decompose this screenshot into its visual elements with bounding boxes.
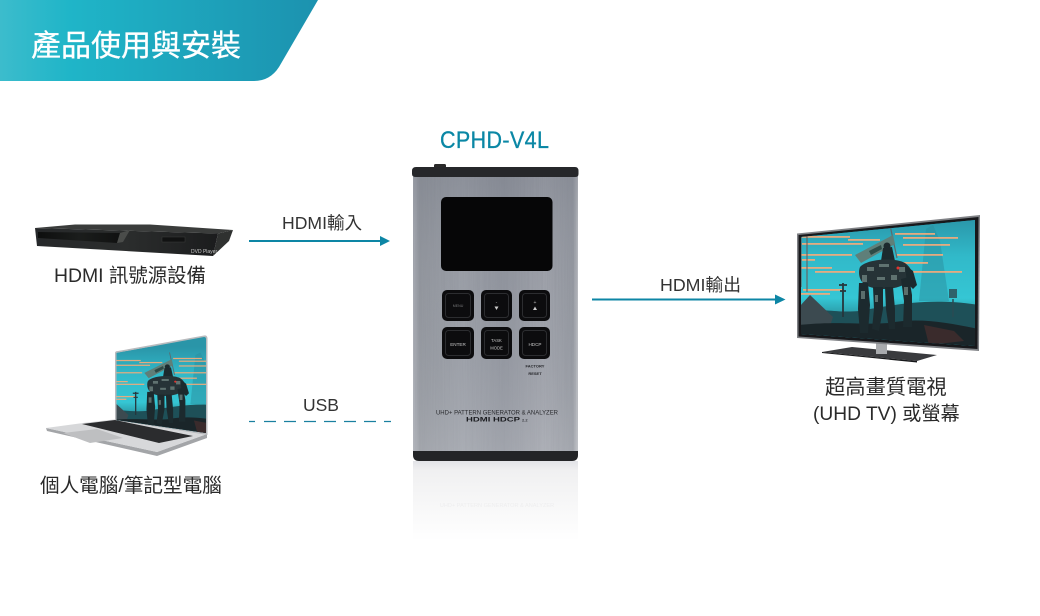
button: plus up [519, 290, 550, 321]
player brand: DVD Player [191, 249, 217, 255]
device: CPHD-V4L analyzer [412, 164, 578, 541]
device label: HDMI HDCP [466, 416, 521, 424]
label: UHD TV [813, 376, 960, 425]
bottom cap [413, 451, 578, 461]
TV stand [822, 342, 937, 362]
arrow: HDMI output [592, 275, 786, 304]
icon: laptop [46, 335, 208, 456]
device label: 2.2 [522, 418, 528, 422]
top cap [412, 164, 578, 177]
player buttons [162, 237, 185, 242]
disc slot [38, 232, 120, 243]
button: minus down [481, 290, 512, 321]
metal body [413, 175, 578, 453]
header banner [0, 0, 318, 81]
dashed link: USB: USB [303, 395, 339, 415]
factory reset label: FACTORY [526, 364, 545, 368]
trackpad [63, 429, 123, 443]
title: 產品使用與安裝 [31, 30, 241, 63]
label: HDMI source: HDMI 訊號源設備 [54, 265, 206, 287]
button: task mode: MODE [490, 346, 503, 350]
button: hdcp: HDCP [528, 342, 542, 347]
label: UHD TV: (UHD TV) 或螢幕 [813, 403, 960, 425]
button: menu: MENU [453, 304, 464, 308]
laptop base [46, 419, 207, 456]
device label: UHD+ PATTERN GENERATOR & ANALYZER [436, 410, 558, 416]
arrow: HDMI output: HDMI輸出 [660, 275, 741, 295]
button: minus down: - [496, 300, 498, 306]
button: enter [442, 327, 474, 359]
device label [436, 410, 558, 424]
player front face [35, 228, 218, 256]
reflection [413, 461, 578, 541]
button: plus up: + [534, 300, 537, 306]
button: enter: ENTER [450, 342, 466, 347]
arrow: HDMI input: HDMI輸入 [282, 213, 362, 233]
icon: television [797, 215, 980, 362]
button: hdcp [519, 327, 550, 359]
factory reset label [526, 364, 545, 376]
arrow: HDMI input [249, 213, 390, 246]
button: task mode: TASK [491, 338, 502, 343]
button: menu [442, 290, 474, 321]
button: task mode [481, 327, 512, 359]
reflection: UHD+ PATTERN GENERATOR & ANALYZER [440, 503, 554, 509]
slot highlight [117, 230, 130, 243]
TV screen [801, 220, 975, 346]
product name heading: CPHD-V4L [440, 127, 549, 153]
player side face [213, 230, 233, 256]
keyboard [82, 420, 193, 443]
laptop screen [115, 335, 208, 435]
TV frame [797, 215, 980, 351]
player top face [35, 224, 233, 234]
display screen [441, 197, 552, 271]
label: PC or laptop: 個人電腦/筆記型電腦 [40, 475, 222, 497]
factory reset label: RESET [528, 371, 542, 376]
label: UHD TV: 超高畫質電視 [825, 376, 947, 399]
icon: DVD player [35, 224, 233, 256]
